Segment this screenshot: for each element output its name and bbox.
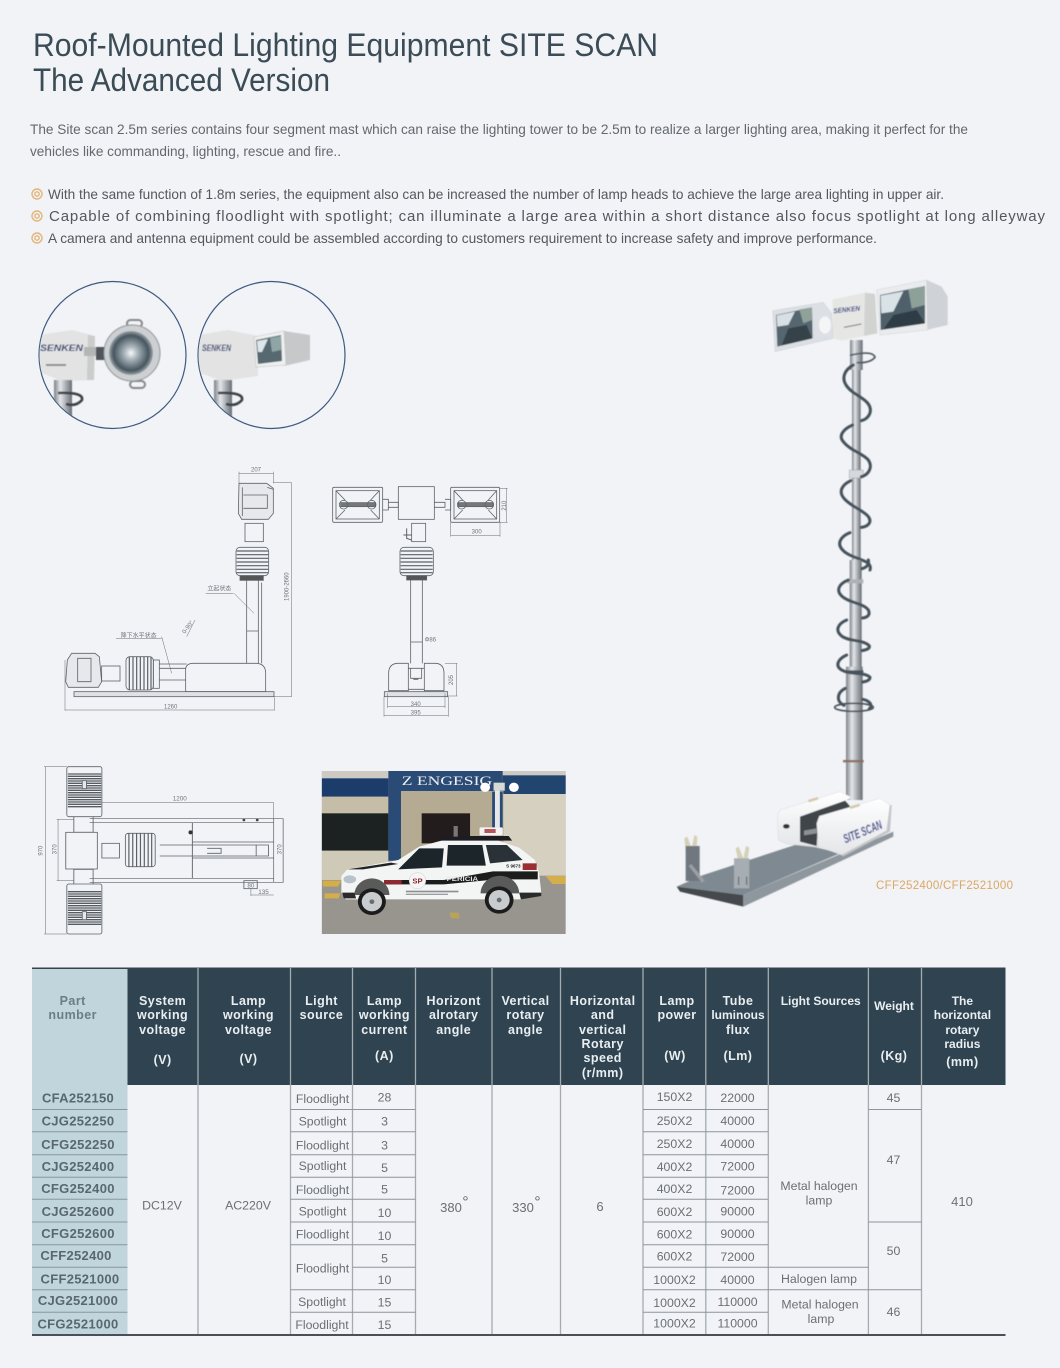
column headings: Light Sources: [781, 994, 861, 1008]
tube luminous flux cells: 40000: [720, 1137, 755, 1151]
light source cells: Spotlight: [299, 1114, 347, 1128]
intro paragraph: The Site scan 2.5m series contains four segment mast which can raise the lighting tower to be 2.5m to realize a larger lighting area, making it perfect for the: [30, 121, 968, 137]
light source cells: Floodlight: [296, 1183, 350, 1197]
part number column background: [32, 1085, 128, 1335]
column headings: source: [300, 1008, 343, 1022]
column headings: (V): [239, 1052, 258, 1066]
part numbers: CFG252400: [41, 1181, 115, 1196]
bullet icon 2: [32, 211, 42, 221]
column headings: alrotary: [429, 1008, 478, 1022]
column headings: luminous: [711, 1008, 765, 1022]
lamp working current cells: 10: [378, 1229, 391, 1243]
car photo with roof-mounted lights: Z ENGESIG: [402, 773, 492, 788]
tube luminous flux cells: 72000: [720, 1160, 755, 1174]
column headings: voltage: [225, 1023, 272, 1037]
light sources cells: lamp: [806, 1194, 832, 1208]
light source cells: Spotlight: [299, 1159, 347, 1173]
column headings: System: [139, 994, 186, 1008]
column headings: rotary: [945, 1023, 980, 1037]
bullet text 1: With the same function of 1.8m series, the equipment also can be increased the number of lamp heads to achieve the large area lighting in upper air.: [48, 186, 944, 202]
tube luminous flux cells: [717, 1091, 758, 1330]
table bottom rule: [32, 1334, 1006, 1336]
column headings: angle: [436, 1023, 471, 1037]
column headings: (r/mm): [582, 1066, 623, 1080]
column headings: rotary: [506, 1008, 545, 1022]
part numbers: CFF252400: [40, 1248, 112, 1263]
technical drawing: front elevation: 205: [449, 674, 455, 685]
intro paragraph: vehicles like commanding, lighting, rescue and fire..: [30, 143, 341, 159]
lamp power cells: 400X2: [657, 1182, 692, 1196]
lamp power cells: 1000X2: [653, 1296, 696, 1310]
tube luminous flux cells: 72000: [720, 1250, 755, 1264]
technical drawing: side elevation: 立起状态: [207, 584, 231, 592]
lamp working current cells: 15: [378, 1318, 391, 1332]
car photo with roof-mounted lights: SP: [412, 877, 423, 885]
table grid lines: [32, 968, 922, 1335]
light sources cells: Halogen lamp: [781, 1272, 857, 1286]
lamp power cells: 600X2: [657, 1205, 692, 1219]
technical drawing: top view: 370: [276, 844, 283, 854]
column headings: (Lm): [724, 1049, 752, 1063]
weight cells: 46: [887, 1305, 900, 1319]
tower lower section and base: [677, 560, 893, 907]
tube luminous flux cells: 90000: [720, 1204, 755, 1218]
circle photo: spotlight head: SENKEN: [40, 343, 84, 353]
intro paragraph: [30, 121, 968, 159]
part numbers: CFG2521000: [37, 1316, 119, 1332]
column headings: Light: [305, 994, 338, 1008]
tube luminous flux cells: 110000: [717, 1316, 758, 1330]
technical drawing: top view: 80: [247, 882, 255, 889]
lamp power cells: 600X2: [657, 1250, 692, 1264]
technical drawing: top view: [37, 767, 283, 934]
light source cells: Floodlight: [296, 1138, 350, 1152]
lamp working current cells: 5: [381, 1252, 388, 1266]
light source cells: Floodlight: [296, 1092, 350, 1106]
technical drawing: top view: 1200: [173, 796, 187, 803]
bullet text 2: Capable of combining floodlight with spotlight; can illuminate a large area within a short distance also focus spotlight at long alleyway: [49, 208, 1046, 225]
part numbers: CJG252250: [42, 1114, 114, 1128]
specification table: [32, 968, 1006, 1336]
column headings: voltage: [139, 1023, 186, 1037]
tower upper section: SENKEN: [833, 305, 861, 315]
part numbers: CJG252600: [42, 1204, 114, 1219]
light source cells: Floodlight: [296, 1262, 350, 1276]
lamp power cells: 600X2: [657, 1228, 692, 1242]
product photo: lighting tower: [677, 280, 948, 907]
part numbers: [37, 1090, 119, 1332]
column headings: working: [358, 1008, 410, 1022]
car photo with roof-mounted lights: S 9673: [506, 864, 521, 869]
lamp power cells: 1000X2: [653, 1273, 696, 1287]
weight cells: 47: [887, 1153, 900, 1167]
column headings: angle: [508, 1023, 543, 1037]
part number heading: Part: [60, 994, 86, 1008]
technical drawing: side elevation: 0-90°: [182, 620, 196, 635]
light source cells: Spotlight: [298, 1295, 347, 1309]
rotary radius cell: 410: [951, 1194, 973, 1209]
technical drawing: side elevation: 降下水平状态: [121, 631, 157, 639]
rotation angle and speed cells: 380: [440, 1200, 462, 1215]
title: Roof-Mounted Lighting Equipment SITE SCAN: [33, 27, 658, 63]
column headings: The: [952, 994, 973, 1008]
tube luminous flux cells: 110000: [717, 1295, 758, 1309]
tube luminous flux cells: 40000: [720, 1114, 755, 1128]
technical drawing: front elevation: Φ86: [425, 637, 437, 643]
column headings: vertical: [579, 1023, 626, 1037]
system and lamp voltage cells: [142, 1198, 272, 1212]
lamp power cells: 400X2: [657, 1160, 692, 1174]
technical drawing: side elevation: 207: [251, 468, 262, 474]
rotation angle and speed cells: 330: [512, 1200, 534, 1215]
feature bullet list: [32, 186, 1046, 246]
bullet icon 1: [32, 189, 42, 199]
column headings: (V): [154, 1053, 172, 1067]
part numbers: CFG252250: [41, 1137, 115, 1152]
table header background: [32, 968, 1006, 1085]
lamp power cells: [653, 1090, 696, 1330]
technical drawing: front elevation: 395: [411, 710, 421, 716]
system and lamp voltage cells: DC12V: [142, 1198, 183, 1212]
technical drawing: front elevation: 210: [502, 500, 508, 511]
column headings: power: [657, 1008, 697, 1022]
column headings: (mm): [946, 1055, 979, 1069]
part numbers: CFA252150: [42, 1090, 114, 1106]
column headings: Weight: [874, 999, 914, 1013]
technical drawing: top view: 970: [37, 845, 45, 856]
technical drawing: side elevation: 1900-2660: [284, 572, 290, 601]
light sources cells: [780, 1179, 859, 1326]
lamp working current cells: 10: [378, 1273, 391, 1287]
lamp working current cells: 5: [381, 1161, 388, 1175]
column headings: current: [361, 1023, 408, 1037]
car photo with roof-mounted lights: PERÍCIA: [447, 874, 478, 883]
rotation angle and speed cells: °: [534, 1194, 541, 1211]
light source cells: Spotlight: [299, 1204, 347, 1218]
part number heading: [48, 994, 97, 1022]
part number heading: number: [48, 1008, 97, 1022]
title: [33, 27, 658, 98]
rotation angle and speed cells: °: [462, 1194, 469, 1211]
system and lamp voltage cells: AC220V: [225, 1198, 272, 1212]
rotation angle and speed cells: 6: [596, 1199, 604, 1214]
light source cells: Floodlight: [295, 1318, 349, 1332]
lamp power cells: 250X2: [657, 1114, 692, 1128]
car photo with roof-mounted lights: [322, 771, 566, 934]
circle photo: spotlight head: [39, 282, 186, 428]
column headings: [136, 994, 991, 1080]
column headings: horizontal: [934, 1008, 991, 1022]
column headings: flux: [726, 1023, 750, 1037]
column headings: radius: [944, 1037, 981, 1051]
technical drawing: front elevation: [333, 487, 508, 717]
lamp working current cells: 28: [378, 1090, 391, 1104]
tube luminous flux cells: 90000: [720, 1227, 755, 1241]
lamp working current cells: [378, 1090, 391, 1332]
light source cells: Floodlight: [296, 1228, 350, 1242]
part numbers: CFG252600: [41, 1226, 115, 1241]
technical drawing: top view: 370: [51, 844, 58, 854]
tower upper section: [773, 280, 948, 570]
technical drawing: side elevation: 1260: [164, 704, 178, 710]
light sources cells: Metal halogen: [780, 1179, 858, 1193]
column headings: Horizontal: [570, 994, 636, 1008]
part numbers: CJG2521000: [38, 1293, 118, 1308]
part numbers: CJG252400: [42, 1159, 114, 1174]
tube luminous flux cells: 72000: [720, 1184, 755, 1198]
column headings: Lamp: [367, 994, 402, 1008]
column headings: working: [222, 1008, 274, 1022]
technical drawing: front elevation: 340: [411, 702, 421, 708]
circle photo: floodlight head: [198, 282, 345, 428]
weight cells: [887, 1091, 900, 1319]
column headings: working: [136, 1008, 188, 1022]
column headings: Tube: [723, 994, 753, 1008]
circle photo: floodlight head: SENKEN: [202, 343, 231, 353]
lamp working current cells: 5: [381, 1182, 388, 1196]
column headings: (Kg): [881, 1049, 907, 1063]
lamp working current cells: 10: [378, 1206, 391, 1220]
column headings: Rotary: [582, 1037, 624, 1051]
tube luminous flux cells: 40000: [720, 1273, 755, 1287]
column headings: speed: [584, 1051, 622, 1065]
lamp power cells: 1000X2: [653, 1316, 696, 1330]
bullet text 3: A camera and antenna equipment could be assembled according to customers requirement to increase safety and improve performance.: [48, 230, 877, 246]
product model caption: CFF252400/CFF2521000: [876, 880, 1013, 892]
lamp power cells: 250X2: [657, 1137, 692, 1151]
column headings: (A): [375, 1049, 394, 1063]
technical drawing: front elevation: 300: [472, 530, 482, 536]
technical drawing: side elevation: [65, 468, 292, 711]
lamp working current cells: 15: [378, 1296, 391, 1310]
lamp working current cells: 3: [381, 1114, 388, 1128]
rotation angle and speed cells: [440, 1194, 604, 1215]
column headings: Horizont: [427, 994, 481, 1008]
weight cells: 50: [887, 1244, 900, 1258]
light sources cells: lamp: [808, 1312, 834, 1326]
lamp working current cells: 3: [381, 1138, 388, 1152]
technical drawing: top view: 135: [258, 889, 269, 896]
column headings: Vertical: [501, 994, 550, 1008]
column headings: (W): [664, 1049, 686, 1063]
title: The Advanced Version: [33, 62, 330, 98]
column headings: Lamp: [659, 994, 695, 1008]
tube luminous flux cells: 22000: [720, 1091, 755, 1105]
light sources cells: Metal halogen: [781, 1298, 859, 1312]
weight cells: 45: [887, 1091, 900, 1105]
light source cells: [295, 1092, 350, 1332]
bullet icon 3: [32, 233, 42, 243]
lamp power cells: 150X2: [657, 1090, 692, 1104]
column headings: and: [591, 1008, 614, 1022]
part numbers: CFF2521000: [41, 1272, 119, 1286]
column headings: Lamp: [231, 994, 266, 1008]
tower lower section and base: SITE SCAN: [841, 818, 885, 846]
